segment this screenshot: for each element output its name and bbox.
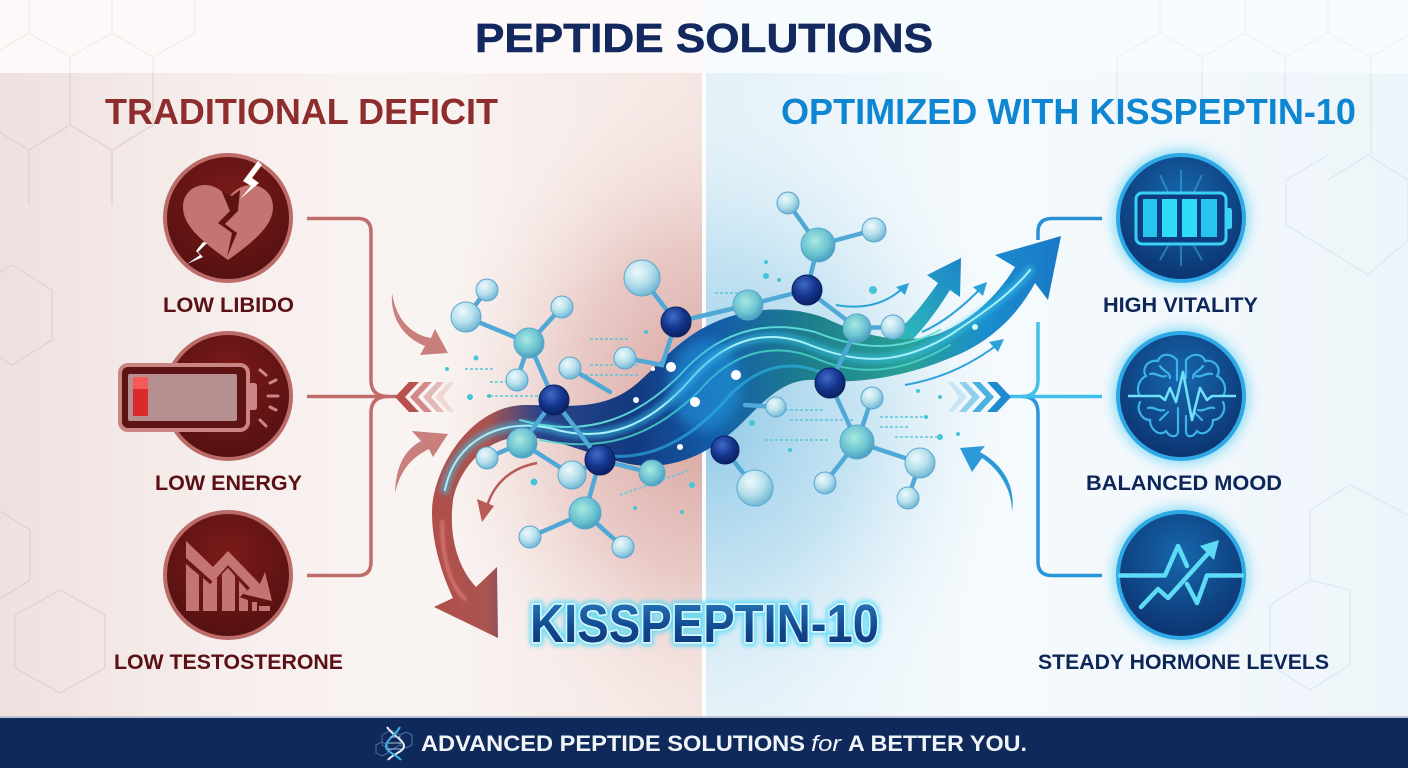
icon: low testosterone — [165, 512, 291, 638]
icon: steady hormone levels — [1113, 507, 1249, 643]
arrow: small inner red — [477, 463, 537, 522]
center divider — [702, 73, 706, 718]
label: high vitality: HIGH VITALITY — [1103, 294, 1258, 317]
peptide ribbon — [432, 236, 1061, 638]
small arrows — [836, 285, 1001, 385]
icon: balanced mood — [1113, 328, 1249, 464]
chevrons: right — [948, 382, 1011, 412]
molecule: bonds — [466, 203, 920, 547]
molecule: atoms — [451, 192, 935, 558]
label: low libido: LOW LIBIDO — [163, 294, 294, 317]
label: balanced mood: BALANCED MOOD — [1086, 472, 1282, 495]
particle streams — [445, 260, 978, 514]
center label: kisspeptin-10: KISSPEPTIN-10 — [530, 594, 879, 654]
footer text — [421, 731, 1027, 756]
arrow: upper left inflow — [392, 293, 448, 355]
label: low testosterone: LOW TESTOSTERONE — [114, 651, 343, 674]
icon: low libido — [165, 155, 291, 281]
heading: traditional deficit: TRADITIONAL DEFICIT — [105, 91, 498, 132]
footer text: for — [811, 731, 843, 756]
connector: left bracket — [307, 218, 398, 576]
connector: right bracket — [1008, 218, 1102, 576]
panel: traditional deficit background — [0, 73, 702, 716]
footer banner — [0, 716, 1408, 768]
panel: optimized background — [706, 73, 1408, 716]
arrow: lower left inflow — [395, 431, 448, 493]
label: low energy: LOW ENERGY — [155, 472, 302, 495]
footer text: A BETTER YOU. — [848, 731, 1027, 756]
title: PEPTIDE SOLUTIONS — [475, 15, 933, 61]
icon: high vitality — [1113, 150, 1249, 286]
small arrow heads — [896, 282, 1004, 352]
footer text: ADVANCED PEPTIDE SOLUTIONS — [421, 731, 805, 756]
heading: optimized with kisspeptin-10: OPTIMIZED WITH KISSPEPTIN-10 — [781, 91, 1356, 132]
chevrons: left — [395, 382, 454, 412]
arrow: lower right inflow — [960, 446, 1013, 512]
glowing teal upward arrow — [860, 258, 961, 370]
label: steady hormone levels: STEADY HORMONE LEVELS — [1038, 651, 1329, 674]
icon: low energy — [120, 333, 291, 459]
center label: kisspeptin-10: KISSPEPTIN-10 — [530, 594, 879, 654]
icon: dna helix — [376, 727, 412, 760]
header band — [0, 0, 1408, 73]
